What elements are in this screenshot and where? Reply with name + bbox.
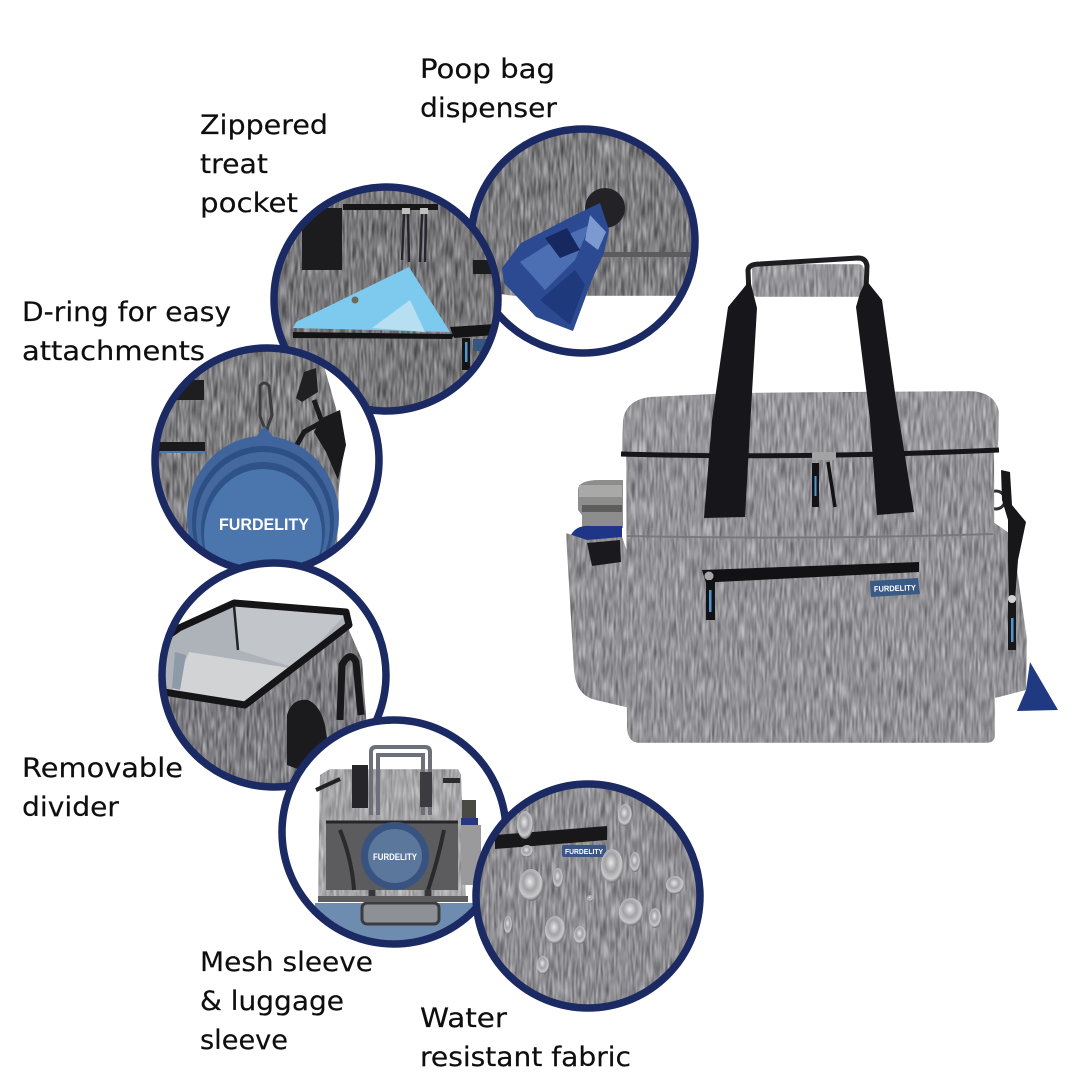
label: Removable divider [22, 753, 183, 823]
brand tag: FURDELITY [565, 847, 603, 856]
label: Removable divider: divider [22, 792, 120, 823]
circle: removable divider [150, 563, 386, 800]
side pocket left [566, 533, 630, 708]
water bottle [570, 480, 623, 545]
icon: dispenser knob [585, 188, 625, 228]
front pocket zipper [702, 562, 919, 620]
label: Mesh sleeve and luggage sleeve: Mesh sleeve [200, 947, 373, 978]
icon: telescoping handle [371, 747, 430, 815]
label: D-ring for easy attachments: D-ring for easy [22, 297, 231, 328]
icon: collapsible bowl: FURDELITY [219, 515, 310, 534]
bag body [168, 630, 366, 784]
circle: D-ring attachments [151, 344, 383, 569]
icon: shoulder strap and clip [293, 368, 346, 480]
icon: zipper pulls [402, 208, 428, 262]
label: Poop bag dispenser: Poop bag [420, 54, 555, 85]
brand tag [562, 845, 606, 857]
icon: water droplets [504, 804, 684, 974]
product: main bag [566, 258, 1058, 743]
circle: zippered treat pocket [274, 187, 498, 411]
handle strap on right side [987, 470, 1026, 650]
zipper strip [495, 826, 607, 849]
label: Mesh sleeve and luggage sleeve [200, 947, 373, 1056]
mini poop bag [1017, 662, 1058, 711]
bag lid [622, 391, 999, 453]
mesh pocket [326, 822, 458, 890]
icon: collapsible bowl [187, 426, 339, 564]
brand tag: FURDELITY [874, 583, 917, 594]
pocket zipper [293, 324, 495, 339]
label: Water resistant fabric [420, 1003, 631, 1073]
water bottle [462, 800, 476, 818]
icon: blue bowl [361, 822, 429, 890]
label: Zippered treat pocket [200, 110, 328, 219]
brand tag [870, 578, 920, 597]
label: Zippered treat pocket: pocket [200, 188, 298, 219]
icon: blue poop bag [502, 203, 609, 331]
label: D-ring for easy attachments [22, 297, 231, 367]
zipper pulls [812, 452, 836, 507]
left handle strap [704, 280, 757, 518]
label: Removable divider: Removable [22, 753, 183, 784]
circle: mesh and luggage sleeve [282, 720, 506, 948]
bag interior [166, 607, 345, 690]
icon: suitcase [315, 890, 473, 940]
label: Poop bag dispenser: dispenser [420, 93, 558, 124]
icon: carabiner [260, 383, 272, 432]
side pocket right [990, 520, 1027, 698]
label: Water resistant fabric: resistant fabric [420, 1042, 631, 1073]
label: Mesh sleeve and luggage sleeve: sleeve [200, 1025, 288, 1056]
label: Zippered treat pocket: treat [200, 149, 268, 180]
icon: handles [287, 657, 361, 770]
lid zipper [621, 450, 999, 456]
bag body [626, 445, 995, 743]
label: D-ring for easy attachments: attachments [22, 336, 205, 367]
label: Mesh sleeve and luggage sleeve: & luggage [200, 986, 344, 1017]
bag back [318, 769, 466, 900]
black rim [150, 603, 349, 705]
icon: blue bowl: FURDELITY [373, 852, 418, 863]
circle: water resistant fabric [476, 784, 700, 1008]
right handle strap [856, 280, 914, 515]
icon: blue treat pouch [293, 267, 450, 332]
label: Zippered treat pocket: Zippered [200, 110, 328, 141]
pocket tab [587, 540, 621, 566]
circle: poop bag dispenser [465, 125, 700, 360]
label: Poop bag dispenser [420, 54, 558, 124]
top grip [748, 258, 867, 297]
label: Water resistant fabric: Water [420, 1003, 508, 1034]
